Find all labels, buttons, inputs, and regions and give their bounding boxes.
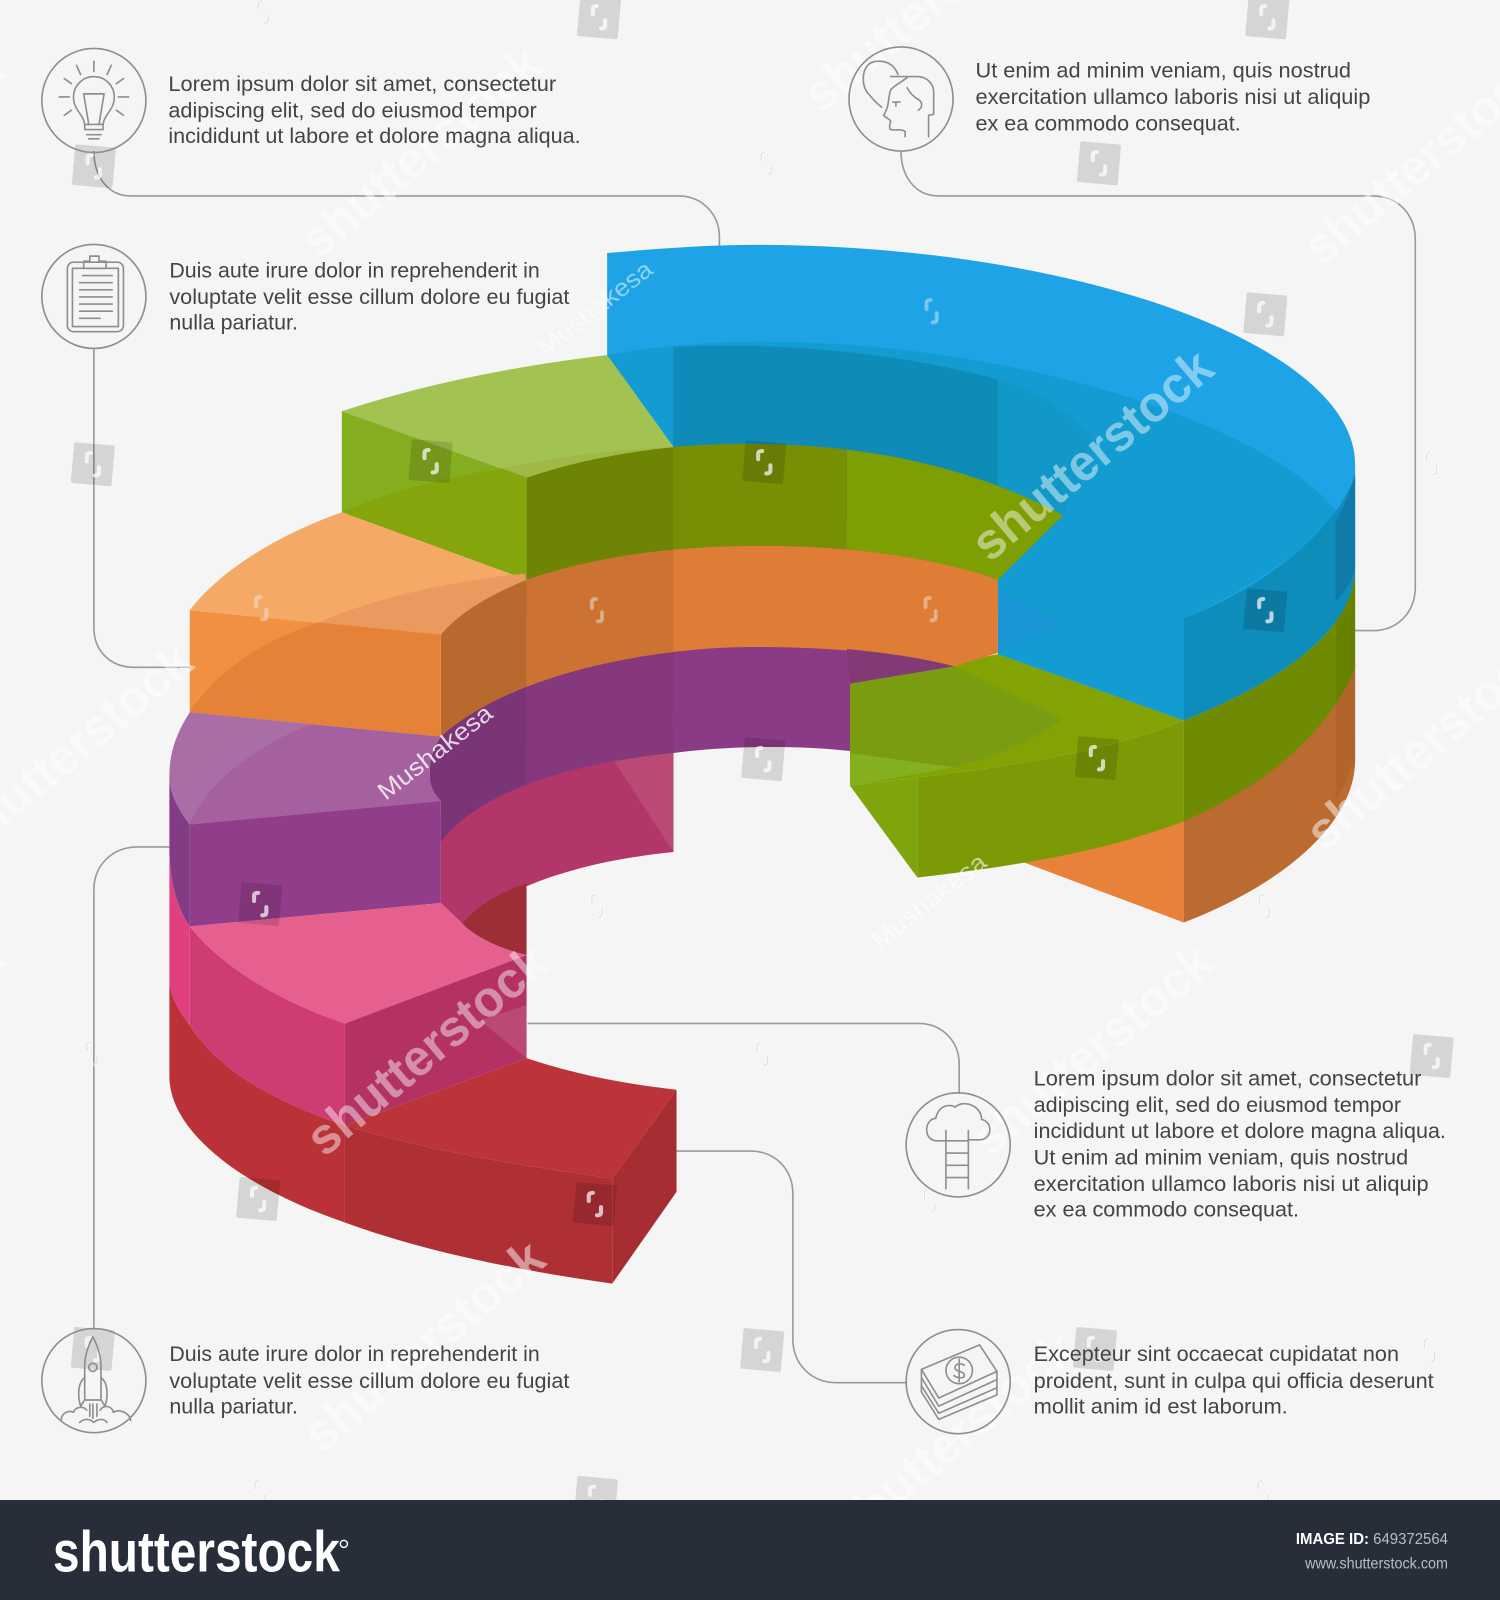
text: block two: Duis aute irure dolor in reprehenderit in [169, 259, 540, 283]
watermarks: shutterstock [295, 932, 559, 1167]
icon: two heads [849, 47, 953, 151]
text: block four: adipiscing elit, sed do eiusmod tempor [1034, 1093, 1401, 1117]
text: block two: nulla pariatur. [169, 311, 298, 335]
text: block two: voluptate velit esse cillum dolore eu fugiat [169, 285, 569, 309]
text: block four: incididunt ut labore et dolore magna aliqua. [1034, 1119, 1446, 1143]
text: block five [169, 1342, 569, 1418]
segment: bottom orange [1023, 663, 1355, 922]
segment: lower green [850, 566, 1355, 878]
text: block four: Ut enim ad minim veniam, quis nostrud [1034, 1145, 1408, 1169]
text: block one [168, 72, 581, 148]
text: block four: ex ea commodo consequat. [1034, 1197, 1299, 1221]
band: inner green wall [526, 444, 1064, 612]
segment: purple step [169, 712, 441, 927]
segment: upper green step [342, 355, 673, 580]
text: block three: ex ea commodo consequat. [976, 112, 1241, 136]
text: block one: Lorem ipsum dolor sit amet, consectetur [168, 72, 556, 96]
segment: red base [169, 980, 677, 1284]
connector lines [94, 151, 1415, 1383]
watermarks: shutterstock [822, 1320, 1086, 1554]
watermarks: shutterstock [292, 1228, 556, 1463]
watermarks: Mushakesa [373, 699, 498, 806]
icon: stack of money [906, 1330, 1010, 1434]
text: block five: Duis aute irure dolor in reprehenderit in [169, 1342, 540, 1366]
watermarks: shutterstock [289, 34, 553, 269]
text: block six: proident, sunt in culpa qui officia deserunt [1034, 1369, 1434, 1393]
text: block four [1034, 1067, 1446, 1221]
icon: cloud with ladder [906, 1093, 1010, 1197]
text: block six [1034, 1342, 1434, 1418]
text: block five: nulla pariatur. [169, 1394, 298, 1418]
segment: blue top [607, 245, 1355, 720]
footer logo: shutterstock [53, 1520, 340, 1584]
footer url: www.shutterstock.com [1304, 1555, 1448, 1572]
text: block six: Excepteur sint occaecat cupidatat non [1034, 1342, 1399, 1366]
text: block five: voluptate velit esse cillum dolore eu fugiat [169, 1369, 569, 1393]
text: block two [169, 259, 569, 335]
icon: rocket [42, 1329, 146, 1433]
text: block three [976, 59, 1370, 136]
band: inner magenta wall [441, 730, 673, 955]
text: block three: Ut enim ad minim veniam, quis nostrud [976, 59, 1351, 83]
text: block three: exercitation ullamco laboris nisi ut aliquip [976, 85, 1370, 109]
footer bar [0, 1500, 1500, 1600]
3D spiral chart [169, 245, 1355, 1284]
band: inner orange wall [441, 546, 998, 740]
watermarks: shutterstock [960, 337, 1224, 572]
watermarks: shutterstock [960, 932, 1224, 1167]
icon: light bulb [42, 48, 146, 153]
text: block four: exercitation ullamco laboris nisi ut aliquip [1034, 1172, 1429, 1196]
text: block one: adipiscing elit, sed do eiusmod tempor [168, 98, 537, 122]
footer image id: IMAGE ID: 649372564 [1296, 1531, 1448, 1548]
band: inner purple wall [429, 643, 852, 847]
watermarks: Mushakesa [533, 256, 658, 362]
segment: pink step [169, 847, 527, 1126]
segment: orange step [190, 512, 527, 737]
watermarks: Mushakesa [867, 848, 992, 955]
text: block six: mollit anim id est laborum. [1034, 1394, 1288, 1418]
icon: clipboard [42, 244, 146, 348]
text: block one: incididunt ut labore et dolore magna aliqua. [168, 124, 581, 148]
text: block four: Lorem ipsum dolor sit amet, consectetur [1034, 1067, 1421, 1091]
